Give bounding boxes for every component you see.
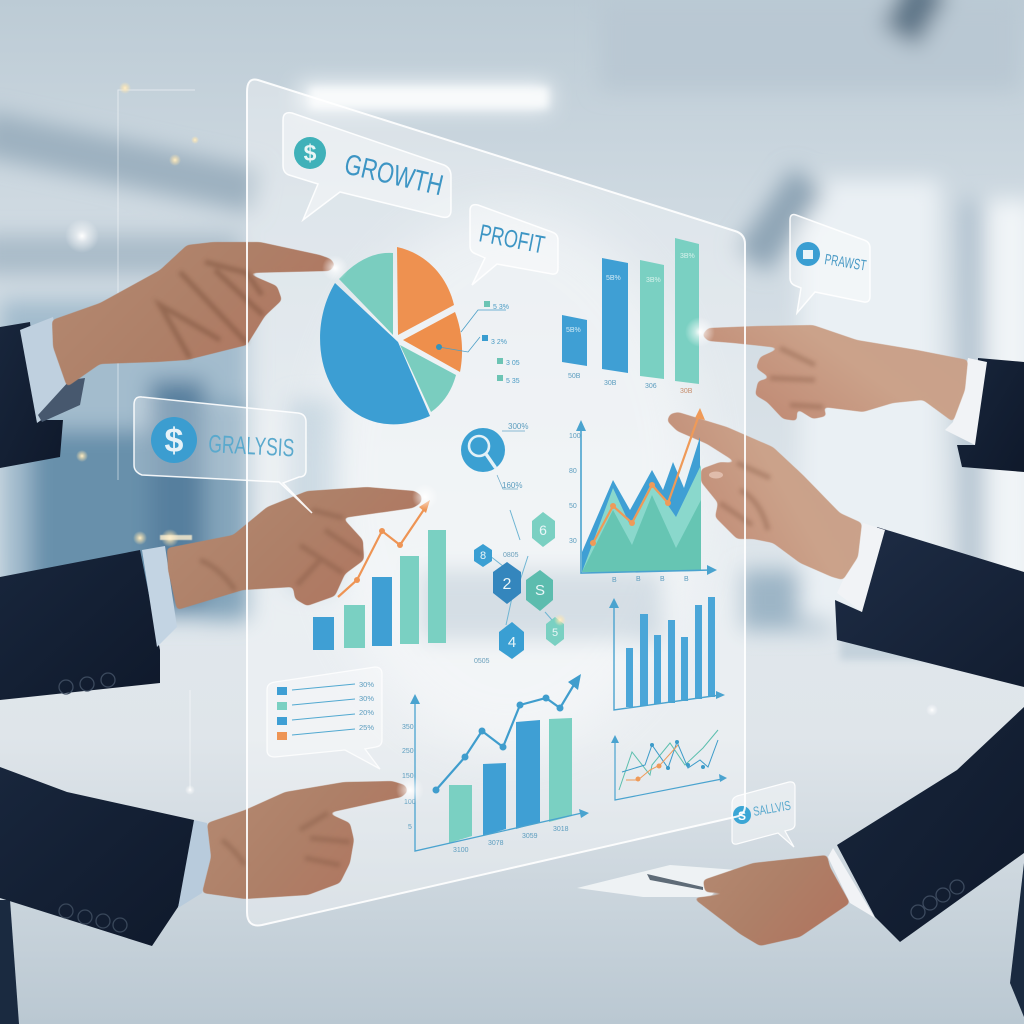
- hexagon network: 0805: [503, 552, 519, 559]
- area chart: 30: [569, 538, 577, 545]
- bar chart: bottom: 350: [402, 724, 414, 731]
- thin hologram lines at left: [118, 90, 195, 790]
- bar chart: top right: 5B%: [606, 275, 621, 282]
- panel border: [247, 80, 745, 925]
- sleeve and hand: middle right: [667, 412, 1024, 687]
- hexagon network: 4: [508, 634, 516, 651]
- bar chart: bottom: [402, 674, 589, 854]
- sleeve and hand: middle left: [0, 487, 422, 700]
- legend bubble: 20%: [359, 708, 374, 717]
- icon: magnifier: [461, 422, 528, 490]
- hexagon network: 6: [539, 522, 547, 538]
- hexagon network: [474, 510, 564, 665]
- sleeve and hand: lower left: [0, 767, 408, 1024]
- bar chart: top right: 30B: [680, 388, 693, 395]
- legend bubble: 30%: [359, 680, 374, 689]
- bar chart: bottom: 3100: [453, 847, 469, 854]
- legend bubble: [267, 667, 382, 769]
- area chart: 80: [569, 468, 577, 475]
- callout: sallvis: [732, 782, 795, 847]
- icon: badge: [796, 242, 820, 266]
- glass panel: [247, 80, 745, 925]
- callout: gralysis: [134, 397, 312, 513]
- area chart: B: [684, 576, 689, 583]
- bar chart: top right: 5B%: [566, 327, 581, 334]
- area chart: 100: [569, 433, 581, 440]
- callout: profit: [470, 205, 558, 285]
- bar chart: bottom: 3078: [488, 840, 504, 847]
- pie labels: 5 3%: [493, 304, 509, 311]
- bar chart: top right: 50B: [568, 373, 581, 380]
- bar chart: top right: 3B%: [646, 277, 661, 284]
- callout: growth: [283, 113, 451, 220]
- pie labels: 5 35: [506, 378, 520, 385]
- hexagon network: 2: [503, 576, 512, 593]
- area chart: B: [636, 576, 641, 583]
- legend bubble: 30%: [359, 694, 374, 703]
- bar chart: top right: 3B%: [680, 253, 695, 260]
- line chart: small: [611, 730, 727, 800]
- bar chart: bottom: 5: [408, 824, 412, 831]
- area chart: B: [612, 577, 617, 584]
- bar chart: bottom: 150: [402, 773, 414, 780]
- icon: magnifier: 160%: [502, 481, 522, 490]
- callout: growth: GROWTH: [341, 149, 446, 202]
- hexagon network: 0505: [474, 658, 490, 665]
- bar chart: top right: 30B: [604, 380, 617, 387]
- sleeve and hand: upper right: [702, 325, 1024, 472]
- sparkles and fingertip glows: [65, 82, 938, 804]
- area chart: [569, 408, 717, 584]
- icon: dollar: $: [165, 422, 184, 460]
- icon: dollar: [151, 417, 197, 463]
- icon: dollar: $: [304, 140, 317, 166]
- callout: prawst: [790, 215, 870, 313]
- bar chart: bottom: 3018: [553, 826, 569, 833]
- callout: profit: PROFIT: [477, 219, 547, 259]
- pie chart: [320, 247, 520, 424]
- bar chart: right: [609, 597, 725, 710]
- area chart: 50: [569, 503, 577, 510]
- callout: gralysis: GRALYSIS: [208, 430, 295, 462]
- pie labels: [436, 301, 520, 385]
- callout: sallvis: SALLVIS: [752, 798, 792, 819]
- callout: prawst: PRAWST: [823, 251, 868, 275]
- bar chart: top right: [562, 238, 699, 395]
- icon: dollar: S: [738, 809, 746, 823]
- sleeve and hand: upper left: [0, 242, 335, 468]
- pie labels: 3 2%: [491, 339, 507, 346]
- hexagon network: 8: [480, 550, 486, 562]
- bar chart: bottom: 250: [402, 748, 414, 755]
- bar chart: top right: 306: [645, 383, 657, 390]
- bar chart: bottom: 3059: [522, 833, 538, 840]
- area chart: B: [660, 576, 665, 583]
- sleeve, hand and tablet: lower right: [577, 707, 1024, 1017]
- pie labels: 3 05: [506, 360, 520, 367]
- hexagon network: S: [535, 582, 545, 599]
- icon: magnifier: 300%: [508, 422, 528, 431]
- hexagon network: 5: [552, 627, 558, 639]
- icon: dollar: [294, 137, 326, 169]
- legend bubble: 25%: [359, 723, 374, 732]
- bar chart: middle left: [313, 500, 446, 650]
- bar chart: bottom: 100: [404, 799, 416, 806]
